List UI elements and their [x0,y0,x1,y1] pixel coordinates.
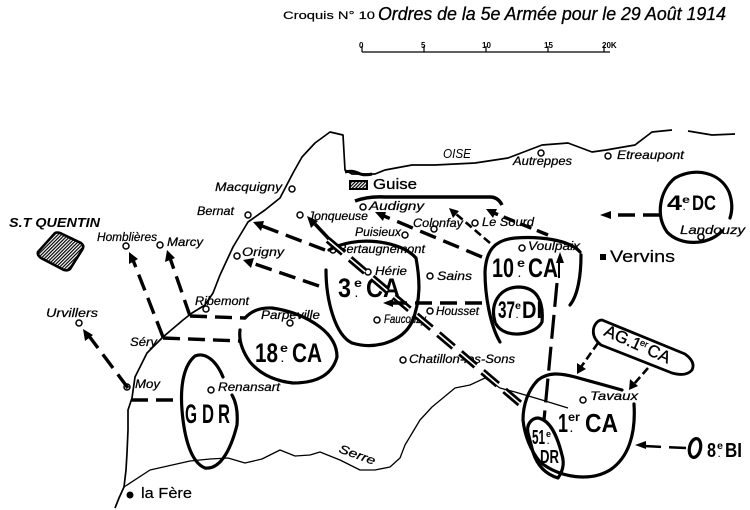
unit: 8e BI: 8 [707,440,716,462]
unit: 4e DC: . [683,203,685,212]
unit: 18e CA: . [281,354,284,365]
unit: 3e CA: e [354,276,362,290]
arrow: to Origny [243,258,319,286]
unit: 51e DR: e [546,429,551,439]
scale bar: 0 [359,41,364,50]
place: Origny [234,245,285,259]
place: Urvillers [46,306,98,326]
arrow: to Homblières [129,252,163,337]
arrow: GDR to Moy [131,398,181,402]
place: Ribemont: Ribemont [195,294,250,308]
river label: OISE: OISE [443,146,471,161]
arrow: 10e CA to Audigny [375,212,482,257]
arrow: 18e CA to Séry [163,338,241,341]
unit: 10e CA: 10 [492,253,514,283]
unit: 18e CA: e [280,341,288,355]
unit: 10e CA: CA [528,253,558,283]
icon: St Quentin town: S.T QUENTIN [9,215,101,230]
arrow: AG to 1er CA [577,343,598,374]
unit: 1er CA [523,374,634,477]
icon: St Quentin town [9,215,101,270]
unit: 4e DC: 4 [667,192,682,215]
arrow: 8e BI to 1er CA [635,441,686,449]
place: Jonqueuse: Jonqueuse [307,209,368,223]
unit: AG 1er CA: er [638,337,650,350]
unit: 37e DI: e [515,301,521,312]
arrow: 10e CA to Colonfay [449,208,490,243]
place: Etreaupont: Etreaupont [617,148,685,162]
place: Tavaux: Tavaux [590,389,639,403]
place: Bernat: Bernat [197,204,235,218]
place: Tavaux [580,389,639,403]
unit: 8e BI: BI [725,440,742,462]
arrow: to Jonqueuse [307,216,330,240]
place: Homblières: Homblières [97,230,157,244]
place: Colonfay: Colonfay [413,216,464,230]
unit: 1er CA: er [568,410,580,424]
place: Landouzy: Landouzy [680,223,746,237]
unit: 37e DI [494,287,542,334]
place: Autreppes: Autreppes [512,154,572,168]
arrow: to Marcy [165,250,190,316]
river label: Serre: Serre [337,442,378,468]
town: Vervins: Vervins [610,247,675,266]
arrow: double line 3e CA diagonal [328,240,524,407]
place: Renansart: Renansart [218,380,281,394]
place: Hérie [365,264,407,278]
place: Housset: Housset [436,304,480,318]
icon: Guise town [345,171,417,193]
unit: 1er CA: 1 [558,408,568,438]
unit: 4e DC [660,172,732,242]
unit: 1er CA: . [570,424,573,435]
unit: 18e CA [240,308,337,383]
unit: GDR: G [185,399,197,429]
scale bar: 15 [544,41,553,50]
place: Marcy [157,235,204,249]
hatched ridge near Guise [355,197,502,205]
place: Séry: Séry [130,335,158,349]
place: Bertaugnemont: Bertaugnemont [338,242,426,256]
unit: 3e CA: CA [366,273,400,303]
unit: 8e BI: e [717,441,723,452]
place: Hérie: Hérie [375,264,407,278]
unit: 3e CA: 3 [338,273,351,303]
unit: 37e DI: 37 [498,297,515,324]
scale bar: 10 [482,41,491,50]
arrow: AG to Tavaux [629,368,648,390]
place: Marcy: Marcy [167,235,204,249]
unit: 51e DR: 51 [532,427,545,449]
unit: 3e CA [326,241,419,345]
unit: AG 1er CA: CA [644,340,674,368]
unit: 18e CA: CA [292,338,322,368]
place: Chatillon-les-Sons: Chatillon-les-Sons [409,352,515,366]
title: Croquis N° 10 [283,10,375,22]
river: Serre [124,378,568,487]
unit: GDR: R [218,399,230,429]
unit: 4e DC: e [682,195,691,206]
place: Faucouzy: Faucouzy [384,312,427,326]
unit: 37e DI: . [516,311,518,320]
scale bar [359,41,617,52]
places [46,148,746,403]
place: Landouzy [680,223,746,240]
arrow: 10e CA to Le Sourd [486,209,548,235]
unit: GDR: D [202,399,214,429]
unit: 8e BI [688,438,742,462]
unit: AG 1er CA [593,320,693,374]
icon: Guise town: Guise [373,176,417,193]
unit: 51e DR [528,418,563,478]
arrow: 3e CA horizontal [383,299,482,307]
place: Moy [124,377,161,391]
arrow: 4e DC to Vervins [600,211,660,219]
unit: 10e CA: e [517,256,525,270]
scale bar: 20K [602,41,617,50]
place: Urvillers: Urvillers [46,306,98,320]
unit: 8e BI: . [718,450,720,459]
place: Le Sourd: Le Sourd [482,215,534,229]
place: Voulpaix: Voulpaix [528,239,581,253]
unit: AG 1er CA: AG.1 [601,321,645,354]
place: Parpeville: Parpeville [261,308,320,322]
unit: 10e CA: . [518,269,521,280]
place: Macquigny: Macquigny [215,180,283,194]
place: Faucouzy [374,312,427,326]
place: Origny: Origny [242,245,285,259]
town: la Fère: la Fère [141,485,192,502]
arrow: to Urvillers [83,329,128,388]
unit: 1er CA: CA [585,408,618,438]
title: Ordres de la 5e Armée pour le 29 Août 1914 [378,4,726,24]
place: Audigny [360,199,425,213]
unit: 18e CA: 18 [255,338,278,368]
place: Audigny: Audigny [368,199,425,213]
place: Parpeville [261,308,320,326]
river: Oise [115,130,735,508]
unit: GDR [182,355,237,468]
arrow: 1er CA north through 10e CA [544,252,564,420]
unit: 3e CA: . [355,289,358,300]
unit: 51e DR: . [547,437,549,446]
arrow: 18e CA to Ribemont [190,316,245,318]
unit: 10e CA [485,238,581,342]
place: Sains: Sains [437,269,472,283]
scale bar: 5 [421,41,426,50]
unit: 4e DC: DC [692,192,716,215]
unit: 51e DR: DR [540,447,559,467]
arrow: to Bernat [253,221,325,250]
place: Puisieux: Puisieux [355,225,402,239]
place: Moy: Moy [135,377,161,391]
place: Bernat [197,204,251,218]
place: Sains [427,269,472,283]
unit: 37e DI: DI [522,297,542,324]
